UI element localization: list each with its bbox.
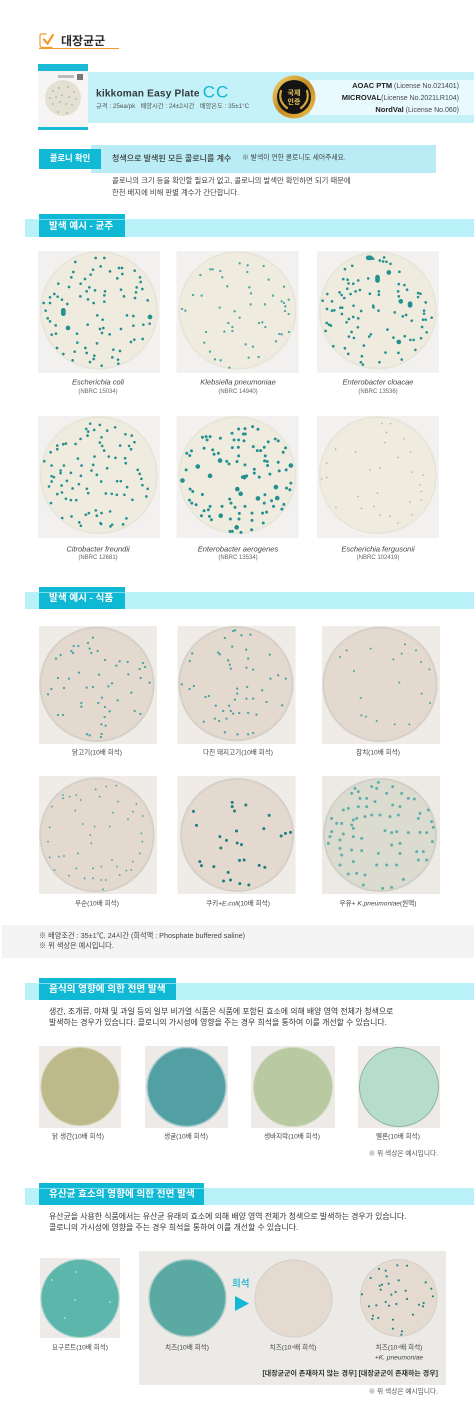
header inner light band	[310, 80, 474, 115]
section band	[25, 983, 474, 1000]
food effect description: 발색하는 경우가 있습니다. 콜로니의 가시성에 영향을 주는 경우 희석을 통하여 이를 개선할 수 있습니다.	[49, 1018, 387, 1027]
caption: + K. pneumoniae: +K. pneumoniae	[375, 1355, 423, 1362]
plate: raw oyster	[145, 1046, 228, 1128]
colony description: 한천 배지에 비해 판별 계수가 간단합니다.	[112, 188, 239, 196]
section heading: 발색 예시 - 식품: 발색 예시 - 식품	[49, 593, 113, 604]
section heading: 발색 예시 - 식품	[39, 587, 125, 609]
food effect description: 생간, 조개류, 야채 및 과일 등의 일부 비가열 식품은 식품에 포함된 효소에 의해 배양 영역 전체가 청색으로	[49, 1006, 393, 1016]
strain number: (NBRC 102419)	[357, 555, 399, 561]
caption: cheese 10^4 + K. pneumoniae: 치즈(10⁴배 희석)	[376, 1345, 422, 1352]
section heading: 음식의 영향에 의한 전면 발색	[39, 978, 176, 1000]
header band	[88, 72, 474, 123]
colony check note: ※ 발색이 연한 콜로니도 세어주세요.	[242, 155, 346, 162]
strain number: (NBRC 14940)	[218, 389, 258, 395]
section band	[25, 1188, 474, 1205]
caption: Klebsiella pneumoniae: Klebsiella pneumoniae	[200, 377, 276, 386]
food effect description	[49, 1006, 393, 1027]
icon: certification medal: 국제	[288, 88, 300, 98]
section heading: 유산균 효소의 영향에 의한 전면 발색: 유산균 효소의 영향에 의한 전면 발색	[49, 1189, 195, 1200]
icon: certification medal	[272, 76, 316, 118]
colony check statement: 청색으로 발색된 모든 콜로니를 계수	[112, 154, 231, 163]
caption: beef: 우순(10배 희석)	[75, 901, 119, 908]
colony description	[112, 176, 351, 196]
strain number: (NBRC 13534)	[218, 555, 258, 561]
strain number: (NBRC 15034)	[78, 389, 118, 395]
caption: milk + K.pneumoniae: 우유+ K.pneumoniae(원액)	[340, 901, 416, 908]
section heading: 유산균 효소의 영향에 의한 전면 발색	[39, 1183, 204, 1205]
colony check label	[39, 149, 101, 169]
product spec line: 규격 : 25ea/pk 배양시간 : 24±2시간 배양온도 : 35±1°C	[96, 103, 249, 110]
caption: yogurt: 요구르트(10배 희석)	[52, 1345, 108, 1352]
lactic acid description: 콜로니의 가시성에 영향을 주는 경우 희석을 통하여 이를 개선할 수 있습니다.	[49, 1223, 298, 1232]
caption: raw oyster: 생굴(10배 희석)	[164, 1134, 208, 1141]
strain number: (NBRC 13536)	[358, 389, 398, 395]
plate: raw chicken liver	[39, 1046, 121, 1128]
plate: chicken	[39, 626, 157, 744]
caption: Escherichia fergusonii: Escherichia fergusonii	[341, 544, 415, 553]
caption: raw clam: 생바지락(10배 희석)	[264, 1134, 320, 1141]
product package image	[38, 64, 88, 111]
plate: Enterobacter aerogenes	[176, 416, 298, 538]
colony check band	[91, 145, 436, 173]
plate: minced pork	[178, 626, 296, 744]
lactic acid description: 유산균을 사용한 식품에서는 유산균 유래의 효소에 의해 배양 영역 전체가 청색으로 발색하는 경우가 있습니다.	[49, 1212, 406, 1221]
plate: melon	[358, 1046, 440, 1128]
plate: yogurt	[40, 1258, 120, 1338]
plate: beef	[39, 776, 157, 894]
section band	[25, 592, 474, 609]
title: 대장균군	[39, 33, 119, 49]
caption: tuna: 참치(10배 희석)	[356, 750, 400, 757]
plate: Klebsiella pneumoniae	[176, 251, 298, 373]
section heading: 발색 예시 - 균주	[39, 214, 125, 237]
caption: minced pork: 다진 돼지고기(10배 희석)	[203, 750, 273, 757]
caption: melon: 멜론(10배 희석)	[376, 1134, 420, 1141]
colony check label: 콜로니 확인	[50, 153, 90, 163]
license list: AOAC PTM (License No.021401)	[352, 81, 459, 90]
plate: cheese 10^4 + K. pneumoniae	[360, 1259, 438, 1337]
section band	[25, 219, 474, 237]
panel: cheese dilution	[139, 1251, 446, 1385]
caption: chicken: 닭고기(10배 희석)	[72, 750, 122, 757]
example note: ※ 위 색상은 예시입니다.	[368, 1389, 438, 1396]
plate: cheese 10x	[148, 1258, 227, 1338]
case labels: [대장균군이 존재하지 않는 경우] [대장균군이 존재하는 경우]	[262, 1370, 438, 1378]
plate: tuna	[322, 626, 440, 744]
plate: cookie + E.coli	[178, 776, 296, 894]
dilution label: 희석	[232, 1278, 249, 1289]
license list: NordVal (License No.060)	[375, 105, 459, 114]
plate: milk + K.pneumoniae	[322, 776, 440, 894]
caption: Escherichia coli: Escherichia coli	[72, 377, 124, 386]
plate: raw clam	[251, 1046, 335, 1128]
title: 대장균군: 대장균군	[61, 34, 105, 48]
caption: cookie + E.coli: 쿠키+E.coli(10배 희석)	[206, 901, 270, 908]
product name: kikkoman Easy Plate CC	[96, 82, 229, 102]
plate: Escherichia fergusonii	[317, 416, 439, 538]
caption: Citrobacter freundii: Citrobacter freundii	[66, 544, 130, 553]
culture conditions note: ※ 위 색상은 예시입니다.	[39, 941, 114, 950]
section heading: 음식의 영향에 의한 전면 발색: 음식의 영향에 의한 전면 발색	[49, 984, 166, 995]
plate: Enterobacter cloacae	[317, 251, 439, 373]
icon: certification medal: 인증	[288, 97, 301, 107]
lactic acid description	[49, 1212, 406, 1232]
culture conditions note: ※ 배양조건 : 35±1℃, 24시간 (희석액 : Phosphate buffered saline)	[39, 931, 245, 940]
caption: Enterobacter cloacae: Enterobacter cloacae	[343, 377, 413, 386]
caption: Enterobacter aerogenes: Enterobacter aerogenes	[198, 544, 278, 553]
section heading: 발색 예시 - 균주: 발색 예시 - 균주	[49, 221, 113, 232]
license list	[342, 81, 459, 114]
caption: cheese 10^4: 치즈(10⁴배 희석)	[270, 1345, 316, 1352]
caption: raw chicken liver: 닭 생간(10배 희석)	[52, 1134, 104, 1141]
caption: cheese 10x: 치즈(10배 희석)	[165, 1345, 209, 1352]
plate: Escherichia coli	[38, 251, 160, 373]
plate: cheese 10^4	[254, 1260, 332, 1338]
plate: Citrobacter freundii	[38, 416, 160, 538]
culture conditions note	[2, 925, 474, 958]
example note: ※ 위 색상은 예시입니다.	[368, 1151, 438, 1158]
strain number: (NBRC 12681)	[78, 555, 118, 561]
product package lower part	[38, 111, 88, 130]
license list: MICROVAL(License No.2021LR104)	[342, 93, 459, 102]
colony description: 콜로니의 크기 등을 확인할 필요가 없고, 콜로니의 발색만 확인하면 되기 때문에	[112, 176, 351, 185]
arrow: dilution	[235, 1296, 249, 1311]
